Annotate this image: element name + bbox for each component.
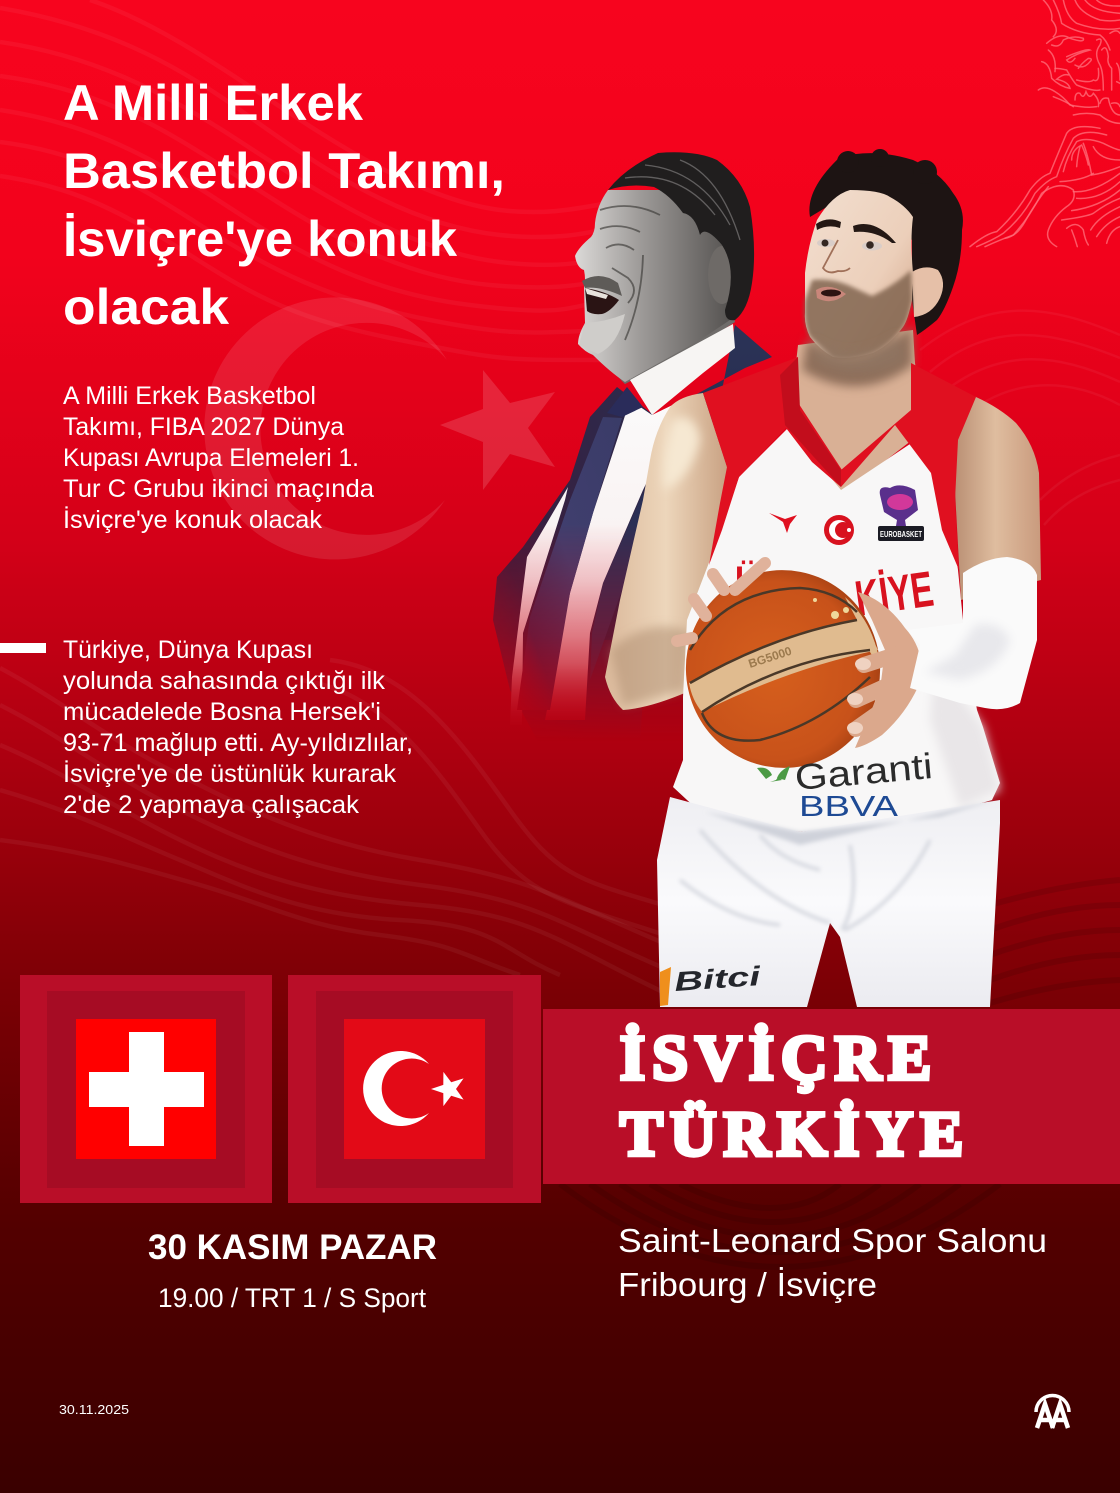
coach shirt left strip (510, 487, 568, 725)
pattern: top right maze (970, 0, 1120, 247)
turkish flag field (344, 1019, 485, 1159)
body text: intro: A Milli Erkek Basketbol (63, 382, 316, 410)
coach lower lapel (590, 493, 644, 676)
ball print: BG5000 (747, 644, 794, 671)
player shorts folds (680, 830, 930, 930)
player hair (809, 153, 963, 335)
swiss flag field (76, 1019, 216, 1159)
coach teeth (585, 288, 608, 299)
title: Basketbol Takımı, (63, 143, 505, 199)
coach ear (710, 246, 731, 304)
coach neck (619, 320, 735, 384)
team name switzerland: İSVİÇRE (620, 1022, 931, 1093)
turkish star watermark (440, 370, 555, 490)
player fingernails (847, 658, 871, 734)
player lips (816, 287, 846, 301)
coach jacket shoulder (592, 325, 772, 640)
player ear (912, 267, 943, 317)
coach tie (517, 417, 622, 710)
player hair curls (837, 149, 937, 184)
player face (805, 190, 913, 358)
body text: intro: Kupası Avrupa Elemeleri 1. (63, 444, 359, 472)
ball right band (845, 597, 880, 668)
ball seams (690, 588, 870, 741)
player jersey shading (930, 660, 1000, 808)
turkish crescent watermark (204, 297, 447, 559)
body text: intro (63, 382, 374, 534)
decorative light wave bands (0, 0, 680, 1000)
team name turkey: TÜRKİYE (620, 1098, 963, 1169)
player neck and chest (789, 330, 925, 495)
panel: switzerland flag (20, 975, 272, 1203)
panel: team names (543, 1009, 1120, 1184)
outer frame (20, 975, 272, 1203)
match time and broadcast: 19.00 / TRT 1 / S Sport (158, 1283, 426, 1313)
coach jacket left (493, 387, 660, 745)
venue: Saint-Leonard Spor Salonu (618, 1222, 1047, 1259)
player neck shade (802, 325, 912, 386)
title: A Milli Erkek (63, 75, 363, 131)
jersey lettering: KİYE (852, 561, 937, 627)
body text: details: Türkiye, Dünya Kupası (63, 636, 313, 664)
eurobasket badge (878, 485, 924, 541)
player arm highlight (663, 418, 700, 490)
sleeve shade (925, 624, 1010, 680)
player open mouth (821, 290, 841, 296)
puma logo (769, 513, 797, 533)
player nose (823, 240, 850, 272)
body text: details (63, 636, 413, 819)
outer frame (288, 975, 541, 1203)
publication date: 30.11.2025 (59, 1402, 129, 1417)
coach beard (579, 314, 625, 354)
coach photo illustration (493, 152, 772, 745)
coach head (575, 190, 740, 382)
coach dark lower jacket (642, 694, 683, 722)
body text: details: mücadelede Bosna Hersek'i (63, 698, 381, 726)
player jersey (673, 427, 1000, 832)
bitci sponsor (660, 961, 762, 1006)
flag star (431, 1072, 464, 1106)
body text: details: 93-71 mağlup etti. Ay-yıldızlılar, (63, 729, 413, 757)
title: olacak (63, 279, 229, 335)
body text: details: 2'de 2 yapmaya çalışacak (63, 791, 360, 819)
flag crescent (363, 1051, 429, 1126)
player neck beard (812, 335, 905, 373)
player jersey hem shade (705, 800, 995, 845)
coach shirt (545, 405, 672, 720)
player left hand fingers (677, 563, 765, 641)
garanti logo leaves (757, 766, 790, 782)
dark wave bands (560, 880, 1120, 1267)
panel: turkey flag (288, 975, 541, 1203)
body text: intro: Tur C Grubu ikinci maçında (63, 475, 374, 503)
venue (618, 1222, 1047, 1303)
player right arm (950, 390, 1041, 600)
ball scuffs (813, 598, 849, 619)
bitci sponsor: Bitci (673, 961, 762, 997)
title (63, 75, 505, 335)
venue: Fribourg / İsviçre (618, 1266, 877, 1303)
player jersey darker trim (780, 357, 841, 487)
decorative faint right waves (920, 311, 1120, 525)
player eyes (817, 239, 882, 250)
coach mouth (585, 288, 619, 314)
turkish crest on jersey (824, 515, 854, 545)
ball body (668, 552, 898, 786)
player arm hair shading (610, 626, 690, 706)
player jersey right red trim (841, 363, 976, 570)
player right hand fingers (856, 652, 905, 729)
player illustration (605, 149, 1041, 1007)
player eyebrows (816, 219, 896, 243)
garanti sponsor: Garanti (793, 745, 934, 798)
inner frame (47, 991, 245, 1188)
body text: details: yolunda sahasında çıktığı ilk (63, 667, 386, 695)
eurobasket badge: EUROBASKET (880, 529, 923, 539)
body text: details: İsviçre'ye de üstünlük kurarak (63, 759, 397, 788)
body text: intro: İsviçre'ye konuk olacak (63, 505, 322, 534)
accent bar (0, 643, 46, 653)
icon: agency logo (1036, 1396, 1069, 1428)
coach wrinkles and eye (600, 206, 660, 340)
player shorts (657, 797, 1000, 1007)
title: İsviçre'ye konuk (63, 211, 457, 267)
player arm sleeve (907, 557, 1037, 709)
player left arm (605, 393, 727, 710)
match date: 30 KASIM PAZAR (148, 1228, 437, 1267)
body text: intro: Takımı, FIBA 2027 Dünya (63, 413, 344, 441)
basketball (668, 552, 898, 786)
team banner (543, 1009, 1120, 1184)
jersey lettering left: Ü (735, 560, 760, 598)
coach collar (630, 324, 735, 415)
coach hair (608, 152, 754, 320)
coach hair highlights (625, 160, 740, 240)
coach tie knot (607, 387, 643, 417)
swiss cross (89, 1032, 204, 1146)
player jersey left red trim (703, 357, 842, 565)
player right hand (855, 592, 922, 748)
inner frame (316, 991, 513, 1188)
player beard (805, 270, 912, 359)
coach moustache (582, 276, 622, 296)
ball band (689, 620, 878, 712)
bbva sponsor: BBVA (799, 791, 899, 823)
